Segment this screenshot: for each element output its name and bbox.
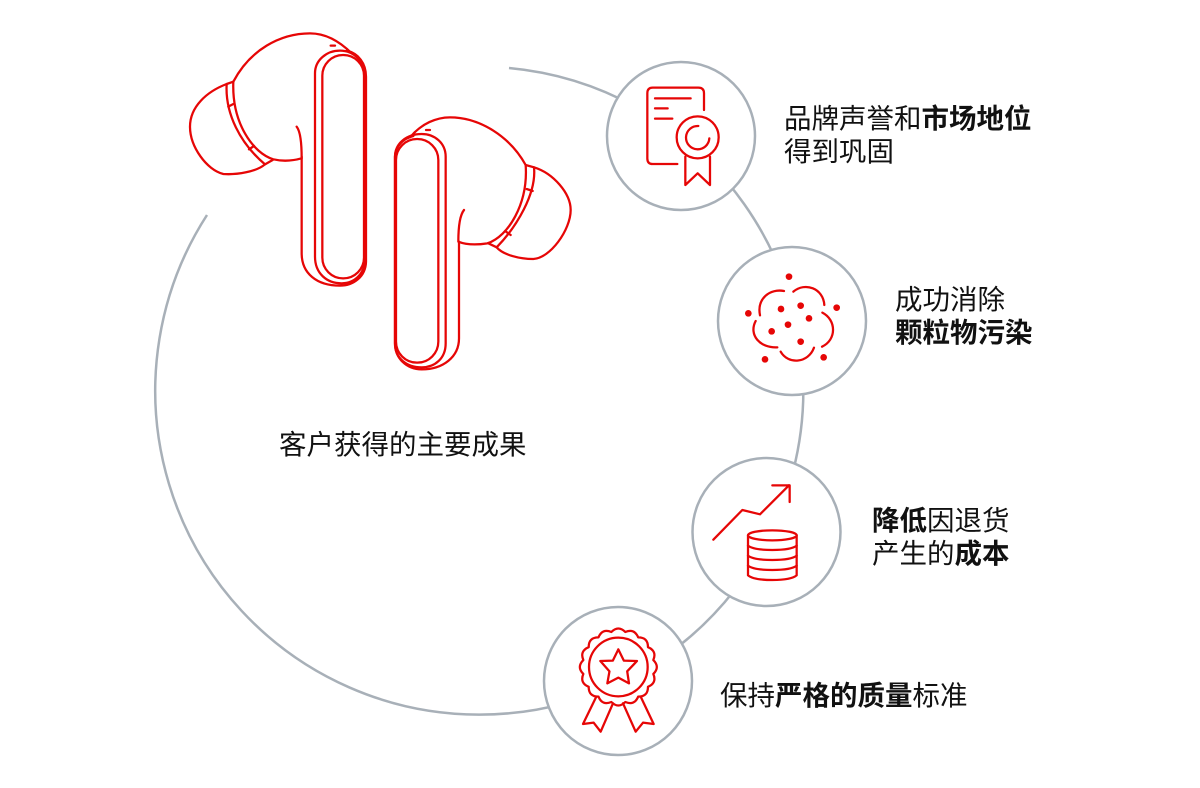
text: quality standards: 保持严格的质量标准 [720,680,968,711]
text: brand reputation [784,103,1032,167]
text: particle elimination: 颗粒物污染 [895,317,1032,348]
text: brand reputation: 品牌声誉和市场地位 [784,103,1032,134]
large connecting circle [155,68,803,715]
icon circle: certificate [607,62,755,210]
icon: right earbud [395,117,571,369]
icon circle: rising chart and coins [692,458,840,606]
icon circle: quality rosette [544,607,692,755]
icon circle: particles [718,247,866,395]
text: brand reputation: 得到巩固 [784,136,894,167]
icon: left earbud [190,33,366,286]
center caption: 客户获得的主要成果 [279,429,526,460]
text: particle elimination [895,284,1032,348]
text: reduced return costs: 产生的成本 [872,538,1010,569]
text: reduced return costs: 降低因退货 [872,505,1010,536]
text: reduced return costs [872,505,1010,569]
text: particle elimination: 成功消除 [895,284,1005,315]
